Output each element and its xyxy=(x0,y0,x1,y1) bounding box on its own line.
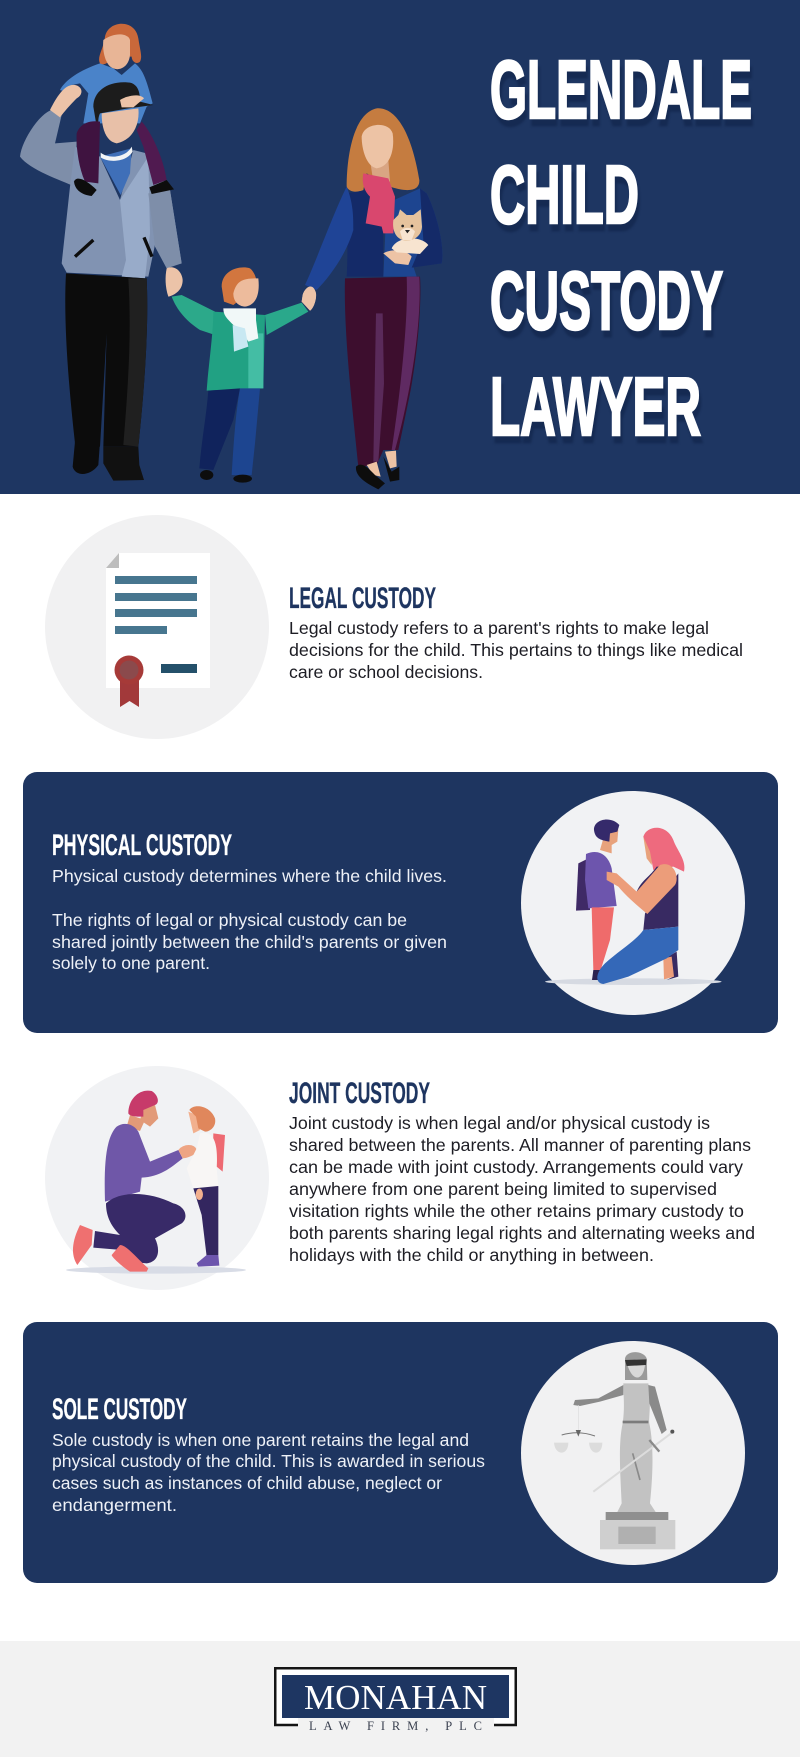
figure: mother holding dog xyxy=(302,108,442,489)
text: joint custody description xyxy=(289,1113,755,1265)
panel: physical custody xyxy=(23,772,778,1033)
illustration: family walking xyxy=(20,24,442,489)
heading: legal custody: LEGAL CUSTODY xyxy=(289,582,436,615)
icon: small dog xyxy=(383,209,428,265)
heading: physical custody: PHYSICAL CUSTODY xyxy=(52,829,232,862)
section: joint custody xyxy=(45,1066,755,1290)
text: physical custody description: Physical custody determines where the child lives. xyxy=(52,866,447,886)
text: sole custody description: physical custody of the child. This is awarded in serious xyxy=(52,1451,485,1471)
hero background xyxy=(0,0,800,494)
figure: child holding hands xyxy=(172,267,316,483)
icon: certificate document in circle xyxy=(45,515,269,739)
title: CHILD xyxy=(490,148,639,241)
heading: joint custody: JOINT CUSTODY xyxy=(289,1077,430,1110)
section: legal custody xyxy=(45,515,743,739)
panel: sole custody xyxy=(23,1322,778,1583)
text: physical custody description xyxy=(52,866,447,973)
icon: mother kneeling with son xyxy=(521,791,745,1015)
text: physical custody description: shared jointly between the child's parents or given xyxy=(52,932,447,952)
logo: Monahan Law Firm xyxy=(275,1668,516,1734)
text: physical custody description: solely to one parent. xyxy=(52,953,210,973)
text: sole custody description: cases such as instances of child abuse, neglect or xyxy=(52,1473,442,1493)
text: joint custody description: shared between the parents. All manner of parenting plans xyxy=(289,1135,751,1155)
hero banner xyxy=(0,0,800,494)
icon: father kneeling with child xyxy=(45,1066,269,1290)
text: sole custody description: Sole custody is when one parent retains the legal and xyxy=(52,1430,469,1450)
panel background xyxy=(23,1322,778,1583)
text: sole custody description xyxy=(52,1430,485,1515)
text: joint custody description: holidays with the child or anything in between. xyxy=(289,1245,654,1265)
text: joint custody description: visitation rights while the other retains primary custody to xyxy=(289,1201,744,1221)
footer band xyxy=(0,1641,800,1757)
text: legal custody description: Legal custody refers to a parent's rights to make legal xyxy=(289,618,709,638)
text: joint custody description: anywhere from one parent being limited to supervised xyxy=(289,1179,717,1199)
heading: sole custody: SOLE CUSTODY xyxy=(52,1393,187,1426)
text: sole custody description: endangerment. xyxy=(52,1495,177,1515)
figure: father with girl on shoulders xyxy=(20,24,183,481)
logo: Monahan Law Firm: MONAHAN xyxy=(304,1678,487,1717)
title xyxy=(490,43,752,453)
text: joint custody description: Joint custody is when legal and/or physical custody is xyxy=(289,1113,710,1133)
panel background xyxy=(23,772,778,1033)
text: legal custody description xyxy=(289,618,743,682)
text: legal custody description: decisions for the child. This pertains to things like medical xyxy=(289,640,743,660)
text: legal custody description: care or school decisions. xyxy=(289,662,483,682)
text: joint custody description: can be made with joint custody. Arrangements could vary xyxy=(289,1157,743,1177)
icon: lady justice statue xyxy=(521,1341,745,1565)
text: physical custody description: The rights of legal or physical custody can be xyxy=(52,910,407,930)
logo: Monahan Law Firm: LAW FIRM, PLC xyxy=(309,1719,482,1733)
text: joint custody description: both parents sharing legal rights and alternating weeks and xyxy=(289,1223,755,1243)
